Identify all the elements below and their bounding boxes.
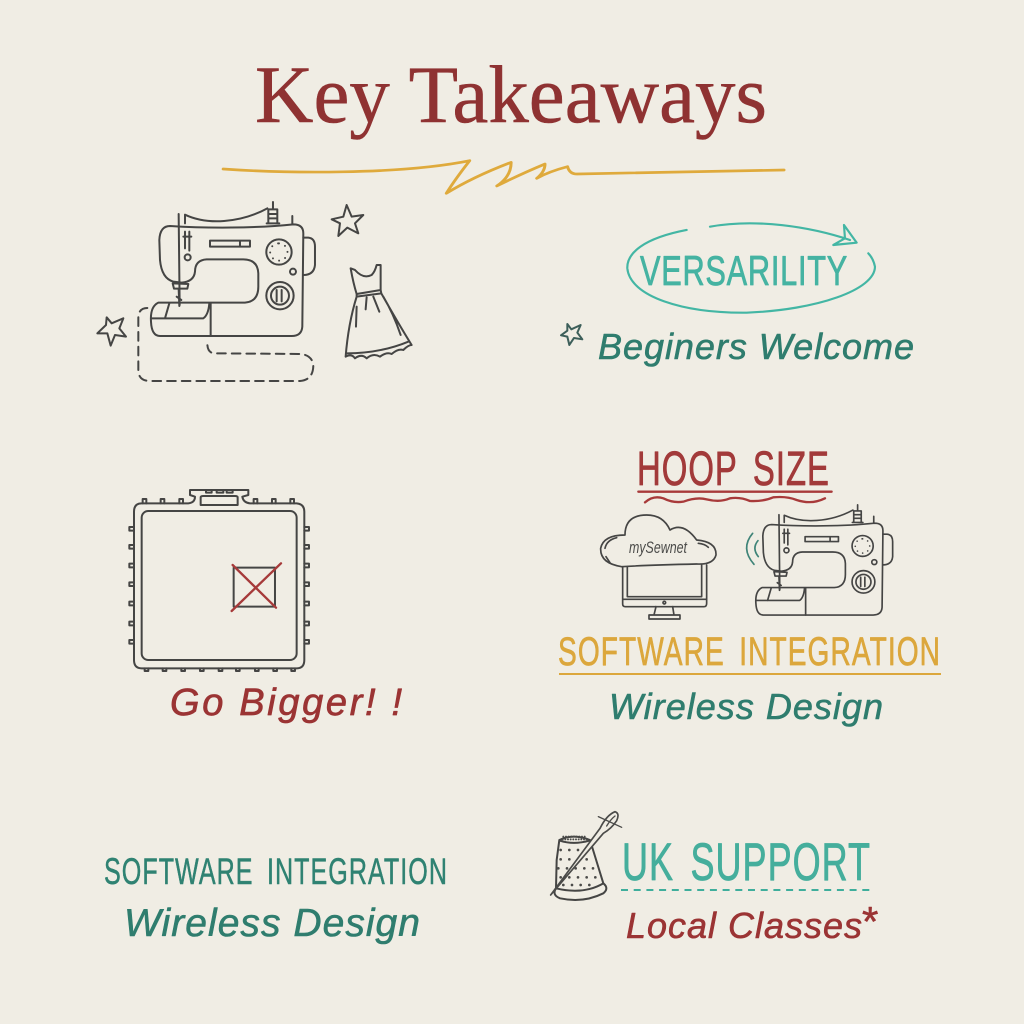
text: go bigger: Go Bigger! ! [170,682,402,724]
title: Key Takeaways [255,49,767,140]
icon: dress [346,265,412,358]
icon: cloud and monitor [601,515,716,619]
icon: red cross [232,563,281,611]
panel: versatility [561,223,914,367]
text: mySewnet: mySewnet [629,538,688,557]
icon: sewing machine small [756,505,893,615]
icon: star left [97,317,126,346]
teal ellipse with arrow [627,223,875,313]
icon: embroidery hoop [129,490,309,671]
icon: wireless waves [747,533,758,564]
icon: thimble and needle [551,812,622,900]
subheading: wireless design: Wireless Design [609,686,883,727]
heading: software integration: SOFTWARE INTEGRATION [104,851,448,892]
subheading: local classes: Local Classes [626,905,862,946]
icon: small star [561,324,582,345]
panel: hoop size and software [558,443,941,727]
asterisk: * [862,898,878,945]
heading: uk support: UK SUPPORT [622,833,871,892]
subheading: wireless design: Wireless Design [124,902,420,945]
panel: uk support [551,812,878,946]
heading: hoop size: HOOP SIZE [637,443,830,496]
heading: versarility: VERSARILITY [640,247,848,294]
icon: dashed stitch line [138,308,313,381]
panel: hoop [129,490,402,724]
subheading: beginners welcome: Beginers Welcome [598,326,914,367]
dashed underline [621,889,871,891]
panel: sewing machine illustration [97,202,412,381]
software underline [559,673,941,675]
icon: star top right [332,205,363,236]
hoop size underlines [638,492,832,502]
title squiggle underline [223,161,784,193]
icon: sewing machine [151,202,315,336]
panel: software integration bottom [104,851,448,945]
